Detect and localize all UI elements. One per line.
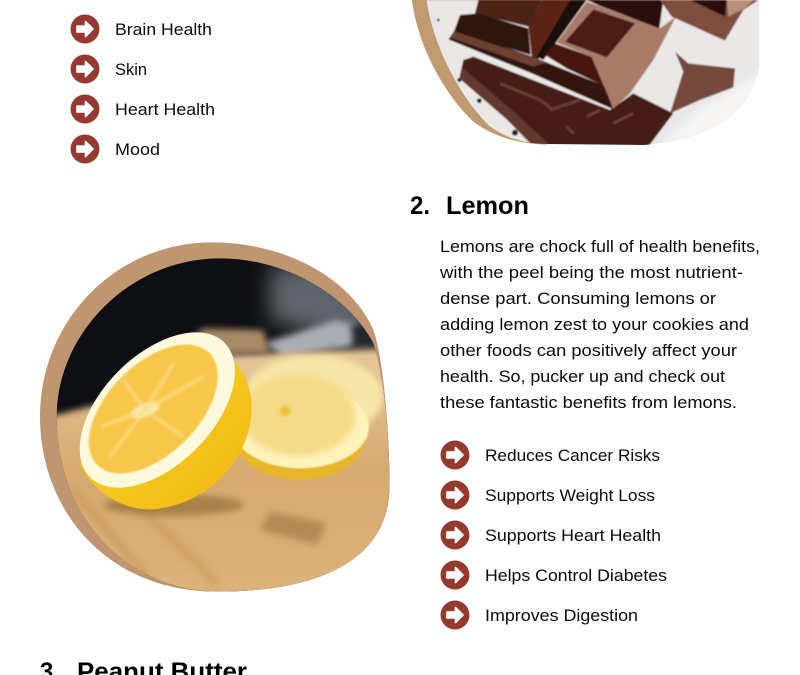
- lemon description: health. So, pucker up and check out: [440, 367, 725, 386]
- wooden board: [50, 348, 397, 597]
- lemon shadow: [103, 494, 243, 516]
- benefit: Heart Health: [70, 94, 215, 124]
- heading: 2. Lemon: Lemon: [446, 192, 529, 220]
- benefit: Skin: Skin: [115, 61, 147, 79]
- light block: [557, 2, 676, 109]
- benefit: Heart Health: Heart Health: [115, 101, 215, 119]
- lemon description: other foods can positively affect your: [440, 341, 737, 360]
- top left chocolate segment: [475, 0, 542, 27]
- upper right block: [660, 0, 758, 41]
- lemon description: adding lemon zest to your cookies and: [440, 315, 749, 334]
- benefit: Supports Heart Health: Supports Heart Health: [485, 527, 661, 545]
- lemon photo with tan backing: [40, 242, 397, 597]
- benefit: Supports Heart Health: [440, 520, 661, 550]
- left benefits list: [70, 14, 215, 164]
- heading: 2. Lemon: [410, 192, 529, 220]
- benefit: Supports Weight Loss: Supports Weight Loss: [485, 487, 655, 505]
- benefit: Mood: [70, 134, 160, 164]
- chocolate bar front edge: [448, 30, 613, 109]
- benefit: Improves Digestion: Improves Digestion: [485, 607, 638, 625]
- lemon description: these fantastic benefits from lemons.: [440, 393, 737, 412]
- benefit: Reduces Cancer Risks: Reduces Cancer Risks: [485, 447, 660, 465]
- broken chocolate piece: [670, 52, 735, 113]
- lemon description: with the peel being the most nutrient-: [439, 263, 743, 282]
- benefit: Helps Control Diabetes: Helps Control Diabetes: [485, 567, 667, 585]
- lemon description: [439, 237, 760, 412]
- benefit: Supports Weight Loss: [440, 480, 655, 510]
- crumbs: [437, 19, 440, 21]
- lemon half: [80, 332, 252, 510]
- lemon benefits list: [440, 440, 667, 630]
- benefit: Reduces Cancer Risks: [440, 440, 660, 470]
- chocolate photo: [412, 0, 767, 147]
- benefit: Mood: Mood: [115, 141, 160, 159]
- benefit: Improves Digestion: [440, 600, 638, 630]
- benefit: Brain Health: Brain Health: [115, 21, 212, 39]
- benefit: Helps Control Diabetes: [440, 560, 667, 590]
- lower chocolate slab: [459, 57, 673, 147]
- lemon description: Lemons are chock full of health benefits,: [440, 237, 760, 256]
- lemon description: dense part. Consuming lemons or: [440, 289, 716, 308]
- dark top segment: [545, 43, 604, 86]
- dark gap: [537, 0, 587, 60]
- benefit: Brain Health: [70, 14, 212, 44]
- lemon slice: [232, 355, 383, 480]
- heading: 2. Lemon: 2.: [410, 192, 430, 220]
- benefit: Skin: [70, 54, 147, 84]
- background blur: [270, 267, 397, 343]
